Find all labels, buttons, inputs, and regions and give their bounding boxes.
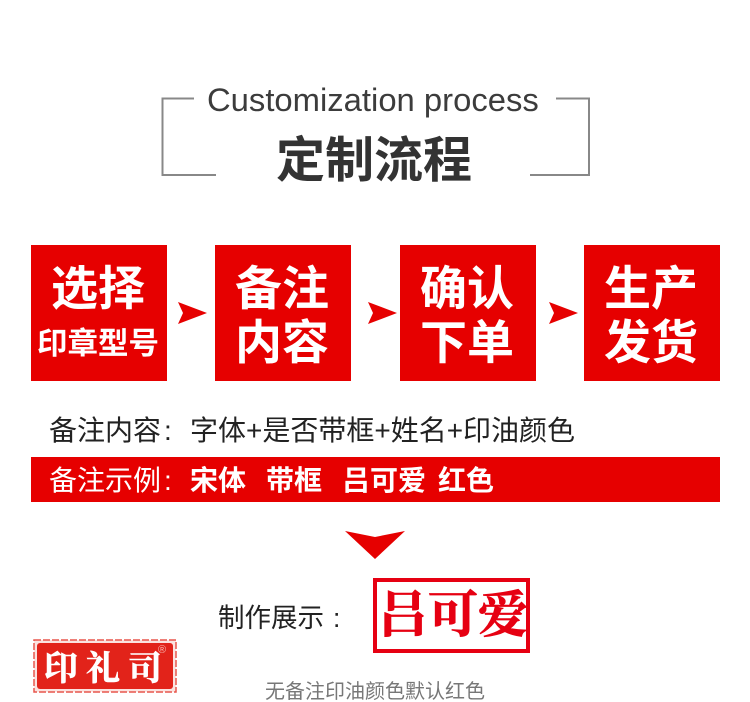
- step 2: add remarks: [215, 245, 351, 381]
- remark contents line: :: [164, 415, 172, 446]
- step 3: confirm order: 确认: [420, 262, 514, 315]
- step 4: production and shipping: 生产: [604, 262, 698, 315]
- step 3: confirm order: 下单: [420, 316, 514, 369]
- remark example bar: [31, 457, 720, 502]
- logo: [33, 639, 177, 693]
- arrow 3: [549, 302, 578, 324]
- stamp sample: 吕可爱: [378, 587, 528, 643]
- remark example bar: 带框: [266, 465, 322, 496]
- production display label: 制作展示: [218, 603, 324, 633]
- arrow 1: [178, 302, 207, 324]
- step 3: confirm order: [400, 245, 536, 381]
- remark contents line: 字体+是否带框+姓名+印油颜色: [190, 415, 575, 446]
- step 2: add remarks: 内容: [235, 316, 329, 369]
- step 4: production and shipping: 发货: [604, 316, 698, 369]
- logo: ®: [158, 644, 166, 656]
- step 4: production and shipping: [584, 245, 720, 381]
- logo: 印礼司: [44, 651, 170, 688]
- down chevron arrow: [345, 531, 405, 559]
- remark example bar: 吕可爱: [342, 465, 426, 496]
- remark contents line: 备注内容: [49, 415, 161, 446]
- step 1: choose stamp model: 选择: [51, 262, 145, 315]
- remark example bar: :: [164, 465, 172, 496]
- chinese title: 定制流程: [276, 134, 472, 188]
- remark example bar: 备注示例: [49, 465, 161, 496]
- arrow 2: [368, 302, 397, 324]
- step 1: choose stamp model: [31, 245, 167, 381]
- remark example bar: 宋体: [190, 465, 246, 496]
- step 1: choose stamp model: 印章型号: [37, 327, 159, 361]
- step 2: add remarks: 备注: [235, 262, 329, 315]
- remark example bar: 红色: [438, 465, 494, 496]
- production display label: :: [333, 603, 340, 633]
- english title: Customization process: [207, 81, 539, 118]
